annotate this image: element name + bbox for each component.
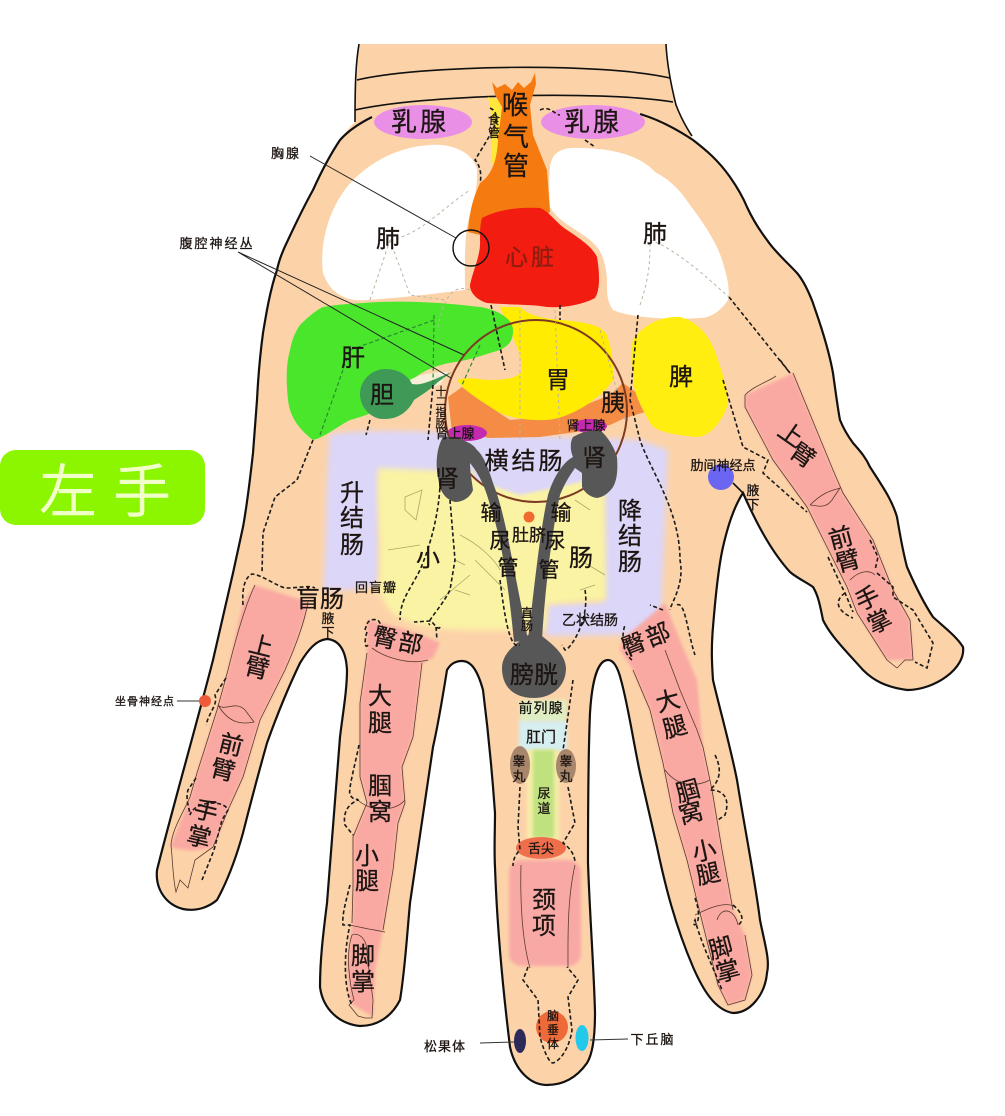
hypothalamus leader line: [590, 1039, 628, 1040]
limb labels: 臂: [242, 653, 272, 685]
organ labels: 睾: [512, 754, 526, 769]
organ labels: 输: [550, 502, 572, 525]
limb labels: 手: [851, 582, 884, 617]
leg on ring finger: [343, 620, 440, 1018]
pineal leader line: [480, 1042, 514, 1043]
arm on thumb: [723, 360, 933, 668]
organ labels: 直: [521, 606, 533, 620]
organ labels: 肾上腺: [566, 418, 606, 433]
organ labels: 指: [436, 405, 446, 419]
tongue tip: [516, 837, 566, 859]
leader labels: 松果体: [424, 1039, 466, 1054]
organ labels: 结: [618, 523, 642, 550]
sciatic point: [199, 695, 211, 707]
limb labels: 前: [826, 523, 856, 555]
organ labels: 管: [488, 125, 500, 140]
organ labels: 横结肠: [484, 448, 566, 475]
navel dot: [524, 512, 534, 522]
limb labels: 脚: [351, 943, 375, 970]
axilla leader line: [733, 483, 744, 494]
thymus leader line: [310, 156, 456, 238]
limb labels: 大: [368, 683, 392, 710]
organ labels: 丸: [559, 769, 573, 784]
limb labels: 腿: [694, 859, 723, 890]
limb labels: 小: [690, 836, 719, 867]
urethra halo: [527, 750, 559, 842]
limb labels: 掌: [184, 822, 214, 854]
esophagus: [488, 97, 503, 166]
organ labels: 尿: [490, 530, 510, 553]
celiac plexus leader lines: [238, 252, 464, 378]
organ labels: 尿: [537, 786, 551, 801]
organ labels: 回盲瓣: [355, 580, 397, 595]
limb labels: 窝: [368, 799, 392, 826]
limb labels: 小: [355, 843, 379, 870]
organ labels: 前列腺: [518, 700, 564, 716]
hypothalamus: [576, 1025, 588, 1051]
organ labels: 肺: [376, 226, 400, 253]
hand silhouette: [157, 44, 963, 1085]
organ labels: 气: [503, 122, 529, 152]
organ labels: 管: [503, 151, 529, 181]
organ labels: 颈: [532, 887, 556, 914]
limb labels: 掌: [863, 605, 896, 640]
limb labels: 臀部: [618, 618, 676, 662]
organ labels: 脑: [547, 1009, 559, 1023]
organ labels: 降: [618, 498, 642, 525]
organ labels: 垂: [547, 1023, 559, 1037]
organ labels: 十: [436, 384, 446, 398]
leader labels: 腋: [746, 483, 760, 498]
organ labels: 乳腺: [391, 107, 449, 137]
limb labels: 掌: [713, 956, 743, 988]
adrenal glands: [447, 419, 607, 441]
organ labels: 结: [340, 505, 364, 532]
organ labels: 脾: [669, 364, 693, 391]
organ labels: [296, 90, 693, 1051]
organ labels: 肾: [435, 466, 459, 493]
limb labels: 臂: [208, 755, 238, 787]
spleen: [631, 317, 728, 437]
transverse colon: [470, 445, 590, 495]
urinary system: [437, 430, 617, 698]
limb labels: 前: [216, 730, 246, 762]
limb labels: 腘: [673, 776, 703, 808]
heart: [470, 208, 599, 307]
anus: [519, 721, 567, 751]
organ labels: 二: [436, 396, 446, 408]
leg on second finger: [620, 603, 752, 1005]
breast zones: [374, 105, 645, 139]
limb labels: 腘: [368, 773, 392, 800]
organ labels: 喉: [502, 90, 528, 120]
organ labels: 胆: [370, 382, 394, 409]
organ labels: 肛门: [526, 729, 556, 746]
leader labels: 下丘脑: [630, 1032, 676, 1047]
limb labels: 腿: [355, 868, 379, 895]
intestine sketch lines: [388, 490, 605, 600]
organ labels: 胰: [601, 390, 625, 417]
limb labels: 上: [246, 631, 276, 663]
stomach ring: [445, 320, 627, 502]
leader labels: [115, 146, 760, 1054]
organ labels: 肠: [521, 619, 533, 633]
organ labels: 肺: [643, 221, 667, 248]
limb labels: 脚: [706, 933, 736, 965]
organ labels: 升: [340, 480, 364, 507]
urethra: [533, 750, 554, 838]
limb labels: 窝: [676, 798, 706, 830]
organ labels: 管: [498, 557, 518, 580]
lavender colon: [323, 431, 668, 640]
organ labels: 肠: [340, 532, 364, 559]
leader labels: 坐骨神经点: [115, 694, 175, 708]
pancreas: [448, 383, 652, 438]
organ labels: 盲肠: [296, 586, 344, 613]
gallbladder and bile duct: [360, 369, 452, 419]
organ labels: 下: [321, 625, 335, 640]
arm on index finger: [170, 574, 315, 892]
sciatic leader line: [177, 700, 199, 702]
organ labels: 肾: [582, 445, 606, 472]
middle finger zones: [509, 680, 588, 1063]
organ labels: 舌尖: [528, 841, 554, 856]
stomach: [457, 307, 613, 420]
limb labels: [184, 417, 896, 996]
organ labels: 睾: [559, 754, 573, 769]
thymus marker: [453, 230, 489, 266]
neck: [509, 860, 581, 966]
leader labels: 胸腺: [271, 146, 301, 161]
limb labels: 臂: [785, 438, 820, 474]
testes: [510, 746, 576, 784]
organ labels: 心脏: [505, 244, 557, 270]
small intestine: [378, 468, 606, 630]
limb labels: 腿: [660, 712, 690, 744]
limb labels: 腿: [368, 710, 392, 737]
leader labels: 下: [746, 497, 760, 512]
hand outline: [157, 44, 963, 1085]
organ labels: 输: [480, 502, 502, 525]
left hand badge: 左手: [39, 460, 187, 525]
limb labels: 上: [773, 417, 808, 453]
organ labels: 肠: [569, 545, 593, 572]
limb labels: 臂: [833, 546, 863, 578]
organ labels: 腋: [321, 611, 335, 626]
right lung: [549, 148, 729, 319]
organ labels: 肠: [618, 549, 642, 576]
left lung: [322, 145, 477, 300]
dotted meridian lines: [262, 108, 790, 650]
organ labels: 乳腺: [564, 107, 622, 137]
organ labels: 丸: [512, 769, 526, 784]
organ labels: 胃: [546, 367, 570, 394]
pituitary: [536, 1011, 568, 1043]
pineal: [514, 1029, 526, 1053]
organ labels: 项: [532, 913, 556, 940]
organ labels: 肾上腺: [435, 426, 475, 441]
organ labels: 肚脐: [512, 526, 546, 545]
liver: [287, 302, 513, 440]
left hand badge: [0, 450, 205, 525]
limb labels: 大: [653, 686, 683, 718]
organ labels: 肠: [436, 417, 446, 430]
organ labels: 道: [537, 801, 551, 816]
organ labels: 肝: [341, 345, 365, 372]
organ labels: 管: [538, 559, 560, 582]
intercostal point: [708, 464, 734, 490]
leader labels: 肋间神经点: [690, 458, 756, 473]
organ labels: 乙状结肠: [562, 612, 618, 628]
limb labels: 手: [191, 796, 221, 828]
prostate: [520, 700, 566, 722]
organ labels: 小: [416, 545, 440, 572]
leader labels: 腹腔神经丛: [179, 236, 255, 251]
limb labels: 掌: [351, 969, 375, 996]
organ labels: 膀胱: [510, 662, 558, 689]
organ labels: 尿: [544, 530, 566, 553]
trachea: [468, 73, 550, 240]
organ labels: 体: [547, 1037, 559, 1051]
organ labels: 食: [488, 112, 500, 127]
limb labels: 臀部: [370, 623, 427, 660]
